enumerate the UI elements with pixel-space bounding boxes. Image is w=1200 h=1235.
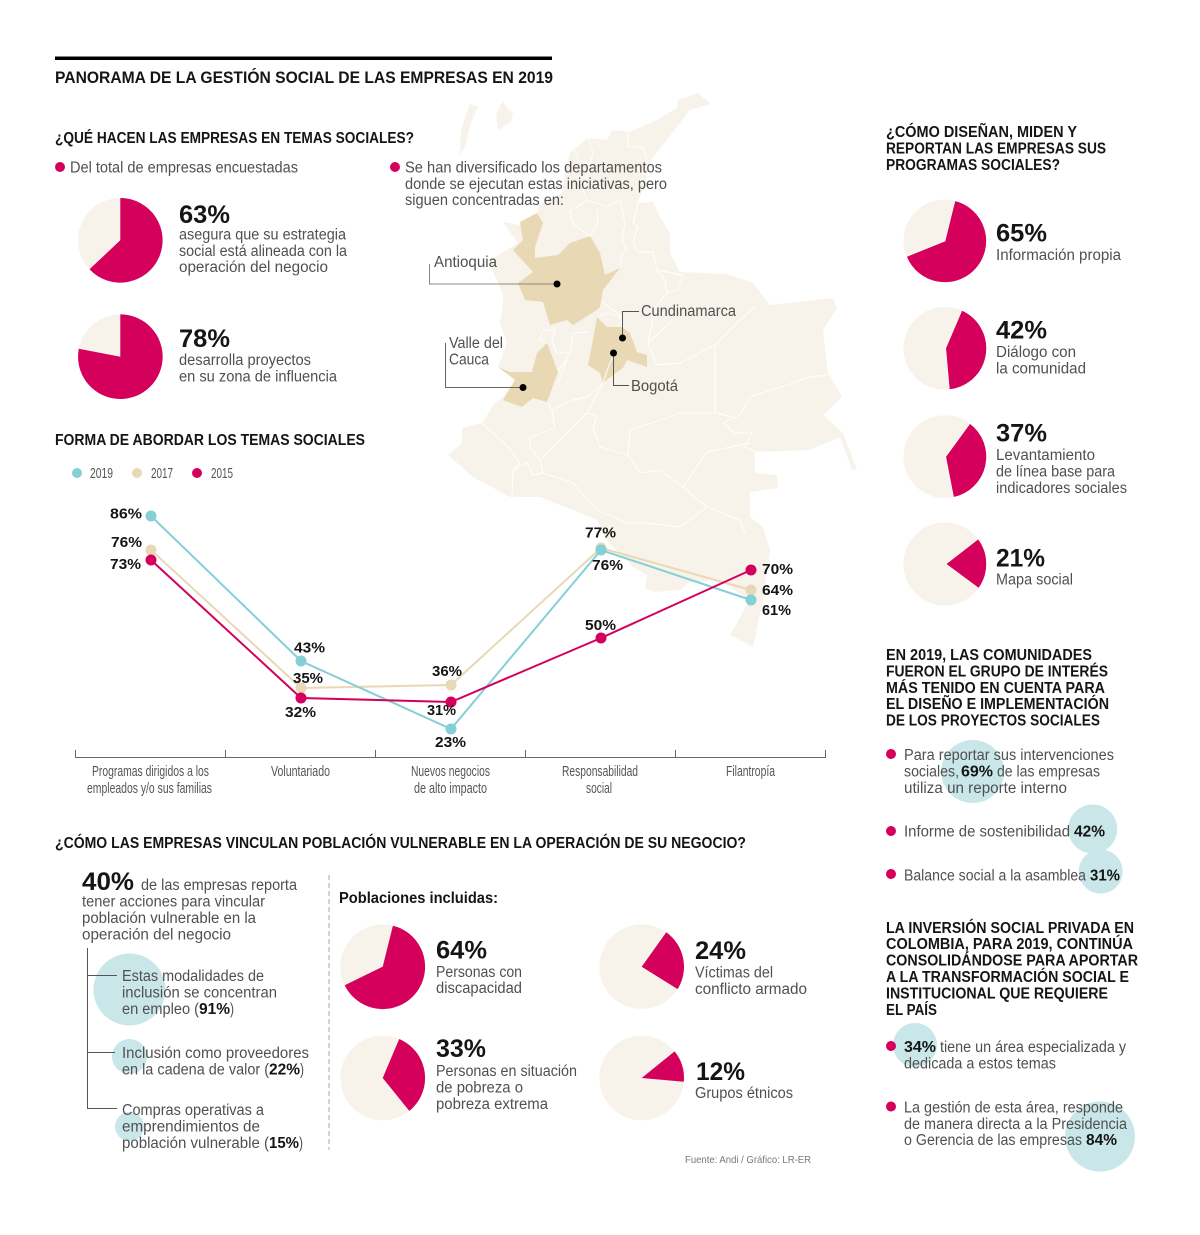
map label: Bogota	[610, 350, 678, 395]
heading: EL PAÍS	[886, 1002, 937, 1019]
item: area especializada: dedicada a estos temas	[904, 1056, 1056, 1072]
pie chart 21%	[904, 522, 987, 606]
data values: 23%	[435, 734, 466, 751]
pie chart 63%	[78, 198, 163, 283]
item: proveedores: )	[300, 1062, 304, 1078]
stat 64%: 64%	[436, 936, 487, 964]
axis categories: Nuevos negocios	[411, 764, 490, 780]
stat 78%: desarrolla proyectos	[179, 352, 311, 369]
stat 64%: discapacidad	[436, 980, 522, 997]
stat 33%: de pobreza o	[436, 1080, 523, 1096]
heading: CONSOLIDÁNDOSE PARA APORTAR	[886, 952, 1138, 970]
stat 24%: Víctimas del	[695, 964, 773, 982]
stat 21%: Mapa social	[996, 572, 1073, 588]
item: presidencia: 84%	[1086, 1132, 1117, 1149]
stat 42%: 42%	[996, 316, 1047, 344]
item: presidencia: La gestión de esta área, responde	[904, 1100, 1123, 1116]
map label: Valle del Cauca	[446, 335, 526, 391]
heading: ¿QUÉ HACEN LAS EMPRESAS EN TEMAS SOCIALES?	[55, 130, 414, 147]
bubbles	[941, 740, 1123, 894]
top rule	[55, 56, 552, 60]
stat 78%: 78%	[179, 325, 230, 353]
legend: 2017	[151, 466, 173, 482]
stat 63%: asegura que su estrategia	[179, 226, 346, 244]
map label: Bogota: Bogotá	[631, 378, 678, 395]
stat 12%: Grupos étnicos	[695, 1085, 793, 1102]
axis categories: de alto impacto	[414, 781, 487, 797]
map of Colombia	[448, 93, 857, 647]
bullet: departamentos: Se han diversificado los departamentos	[405, 160, 662, 176]
map label: Antioquia	[430, 254, 560, 288]
heading	[886, 123, 1106, 174]
item: compras: emprendimientos de	[122, 1118, 260, 1136]
item: reporte interno: Para reportar sus intervenciones	[904, 747, 1114, 764]
bullet: departamentos: siguen concentradas en:	[405, 192, 564, 209]
stat 37%: 37%	[996, 420, 1047, 448]
stat 65%: Información propia	[996, 247, 1121, 264]
item: proveedores: en la cadena de valor (	[122, 1062, 270, 1078]
map: islands	[460, 100, 513, 155]
heading: A LA TRANSFORMACIÓN SOCIAL E	[886, 968, 1129, 986]
axis categories: social	[586, 781, 612, 797]
panel: programas sociales	[886, 123, 1127, 606]
data values: 77%	[585, 524, 616, 542]
heading: COLOMBIA, PARA 2019, CONTINÚA	[886, 935, 1133, 953]
stat 64%	[436, 936, 522, 997]
intro 40%: operación del negocio	[82, 926, 231, 944]
axis categories: Voluntariado	[271, 764, 330, 780]
stat 33%	[436, 1035, 577, 1113]
series 2015	[146, 554, 756, 708]
intro 40%: población vulnerable en la	[82, 910, 256, 927]
bullet: departamentos	[390, 160, 667, 209]
data values: 35%	[293, 670, 323, 687]
heading: MÁS TENIDO EN CUENTA PARA	[886, 680, 1105, 697]
item: area especializada: tiene un área especializada y	[940, 1039, 1126, 1056]
item: sostenibilidad: Informe de sostenibilidad	[904, 824, 1070, 840]
item: presidencia: o Gerencia de las empresas	[904, 1132, 1082, 1149]
data values: 70%	[762, 561, 793, 578]
data values: 76%	[111, 534, 142, 551]
heading: EL DISEÑO E IMPLEMENTACIÓN	[886, 695, 1109, 713]
map label: Valle del Cauca: Valle del	[449, 335, 503, 352]
heading: ¿CÓMO DISEÑAN, MIDEN Y	[886, 123, 1078, 141]
item: reporte interno	[886, 747, 1114, 797]
stat 37%: indicadores sociales	[996, 480, 1127, 497]
data values: 50%	[585, 617, 616, 634]
axis categories: Programas dirigidos a los	[92, 764, 209, 780]
stat 12%	[695, 1058, 793, 1102]
data values: 76%	[592, 557, 623, 574]
map: Bogota slit	[603, 356, 613, 383]
data values: 36%	[432, 663, 462, 680]
tree connector	[88, 948, 117, 1108]
map: Cundinamarca	[588, 317, 647, 383]
stat 42%: la comunidad	[996, 360, 1086, 378]
axis categories: Filantropía	[726, 764, 776, 780]
pie chart 65%	[904, 200, 986, 282]
map: Valle del Cauca	[498, 343, 558, 407]
pie chart 42%	[904, 307, 987, 390]
legend: 2019	[90, 466, 113, 482]
item: empleo: 91%	[199, 1001, 230, 1018]
heading	[886, 919, 1138, 1019]
item: reporte interno: sociales,	[904, 764, 959, 780]
stat 42%: Diálogo con	[996, 344, 1076, 361]
series 2019	[146, 510, 756, 734]
section heading: ¿CÓMO LAS EMPRESAS VINCULAN POBLACIÓN VULNERABLE EN LA OPERACIÓN DE SU NEGOCIO?	[55, 834, 746, 852]
data values: 32%	[285, 704, 316, 721]
axis	[76, 750, 826, 758]
stat 78%: en su zona de influencia	[179, 368, 337, 386]
item: reporte interno: utiliza un reporte interno	[904, 780, 1067, 797]
axis categories: Responsabilidad	[562, 764, 638, 780]
map: department borders	[482, 132, 828, 533]
map label: Antioquia: Antioquia	[434, 254, 497, 271]
stat 63%	[179, 201, 347, 276]
map: Antioquia	[513, 213, 620, 325]
stat 21%	[996, 544, 1073, 588]
axis categories	[87, 764, 776, 797]
stat 33%: Personas en situación	[436, 1063, 577, 1080]
item: area especializada: 34%	[904, 1039, 936, 1056]
pie chart 12%	[599, 1036, 684, 1120]
subheading: Poblaciones incluidas:	[339, 890, 498, 907]
bubbles	[893, 1023, 1135, 1172]
item: empleo: en empleo (	[122, 1001, 200, 1018]
panel: poblacion vulnerable	[55, 834, 811, 1166]
item: empleo	[122, 968, 277, 1018]
pie chart 78%	[78, 314, 163, 399]
axis categories: empleados y/o sus familias	[87, 781, 212, 797]
item: compras	[122, 1102, 303, 1152]
pie chart 33%	[340, 1036, 425, 1120]
panel: line chart	[55, 432, 826, 797]
item: reporte interno: de las empresas	[997, 764, 1100, 780]
intro 40%: de las empresas reporta	[141, 877, 297, 894]
heading: EN 2019, LAS COMUNIDADES	[886, 647, 1092, 664]
dashed divider	[328, 875, 330, 1150]
heading: PROGRAMAS SOCIALES?	[886, 157, 1060, 174]
stat 63%: social está alineada con la	[179, 243, 347, 260]
heading	[886, 647, 1109, 730]
stat 24%: conflicto armado	[695, 981, 807, 998]
intro 40%	[82, 868, 297, 944]
data values: 31%	[427, 702, 456, 719]
heading: INSTITUCIONAL QUE REQUIERE	[886, 986, 1108, 1002]
stat 24%	[695, 937, 807, 998]
heading: LA INVERSIÓN SOCIAL PRIVADA EN	[886, 919, 1134, 937]
item: compras: población vulnerable (	[122, 1135, 270, 1152]
item: proveedores: Inclusión como proveedores	[122, 1045, 309, 1062]
map label: Valle del Cauca: Cauca	[449, 352, 489, 368]
panel: inversion social	[886, 919, 1138, 1172]
bullet: total de empresas: Del total de empresas encuestadas	[70, 160, 298, 176]
map label: Cundinamarca: Cundinamarca	[641, 303, 736, 320]
legend: 2015	[211, 466, 233, 482]
stat 63%: operación del negocio	[179, 259, 328, 276]
panel: que hacen las empresas	[55, 130, 667, 399]
item: area especializada	[886, 1039, 1126, 1072]
stat 37%: de línea base para	[996, 464, 1115, 480]
stat 33%: 33%	[436, 1035, 486, 1063]
item: presidencia: de manera directa a la Presidencia	[904, 1116, 1127, 1133]
stat 65%: 65%	[996, 220, 1047, 248]
item: compras: )	[299, 1135, 303, 1152]
item: presidencia	[886, 1100, 1127, 1149]
item: empleo: )	[230, 1001, 234, 1018]
item: asamblea: Balance social a la asamblea	[904, 868, 1086, 884]
item: sostenibilidad: 42%	[1074, 824, 1105, 840]
item: compras: Compras operativas a	[122, 1102, 264, 1119]
legend	[72, 466, 233, 482]
map: country shape	[448, 93, 857, 647]
series 2017	[146, 542, 756, 694]
stat 63%: 63%	[179, 201, 230, 229]
pie chart 37%	[904, 415, 987, 498]
pie chart 24%	[599, 924, 684, 1009]
item: proveedores	[122, 1045, 309, 1078]
heading: FUERON EL GRUPO DE INTERÉS	[886, 664, 1108, 680]
panel: comunidades	[886, 647, 1123, 894]
stat 65%	[996, 220, 1121, 264]
item: empleo: Estas modalidades de	[122, 968, 264, 985]
stat 37%	[996, 420, 1127, 497]
item: reporte interno: 69%	[961, 764, 993, 780]
chart heading: FORMA DE ABORDAR LOS TEMAS SOCIALES	[55, 432, 365, 449]
data values	[110, 506, 793, 751]
stat 33%: pobreza extrema	[436, 1096, 548, 1113]
item: asamblea: 31%	[1090, 868, 1120, 884]
data values: 73%	[110, 556, 141, 573]
intro 40%: 40%	[82, 868, 134, 896]
intro 40%: tener acciones para vincular	[82, 894, 265, 910]
stat 64%: Personas con	[436, 964, 522, 981]
map label: Cundinamarca	[619, 303, 736, 342]
bubbles	[94, 954, 166, 1141]
item: empleo: inclusión se concentran	[122, 984, 277, 1002]
data values: 64%	[762, 582, 793, 599]
title: PANORAMA DE LA GESTIÓN SOCIAL DE LAS EMPRESAS EN 2019	[55, 68, 553, 87]
stat 24%: 24%	[695, 937, 746, 965]
item: compras: 15%	[269, 1135, 299, 1152]
stat 37%: Levantamiento	[996, 447, 1095, 464]
stat 42%	[996, 316, 1086, 378]
data values: 86%	[110, 506, 142, 522]
source: Fuente: Andi / Gráfico: LR-ER	[685, 1154, 811, 1166]
stat 21%: 21%	[996, 544, 1045, 572]
bullet: departamentos: donde se ejecutan estas iniciativas, pero	[405, 176, 667, 193]
stat 12%: 12%	[696, 1058, 745, 1086]
data values: 43%	[294, 640, 325, 656]
heading: REPORTAN LAS EMPRESAS SUS	[886, 140, 1106, 158]
data values: 61%	[762, 602, 791, 619]
pie chart 64%	[340, 924, 425, 1009]
item: proveedores: 22%	[269, 1062, 300, 1078]
stat 78%	[179, 325, 337, 386]
heading: DE LOS PROYECTOS SOCIALES	[886, 712, 1100, 730]
